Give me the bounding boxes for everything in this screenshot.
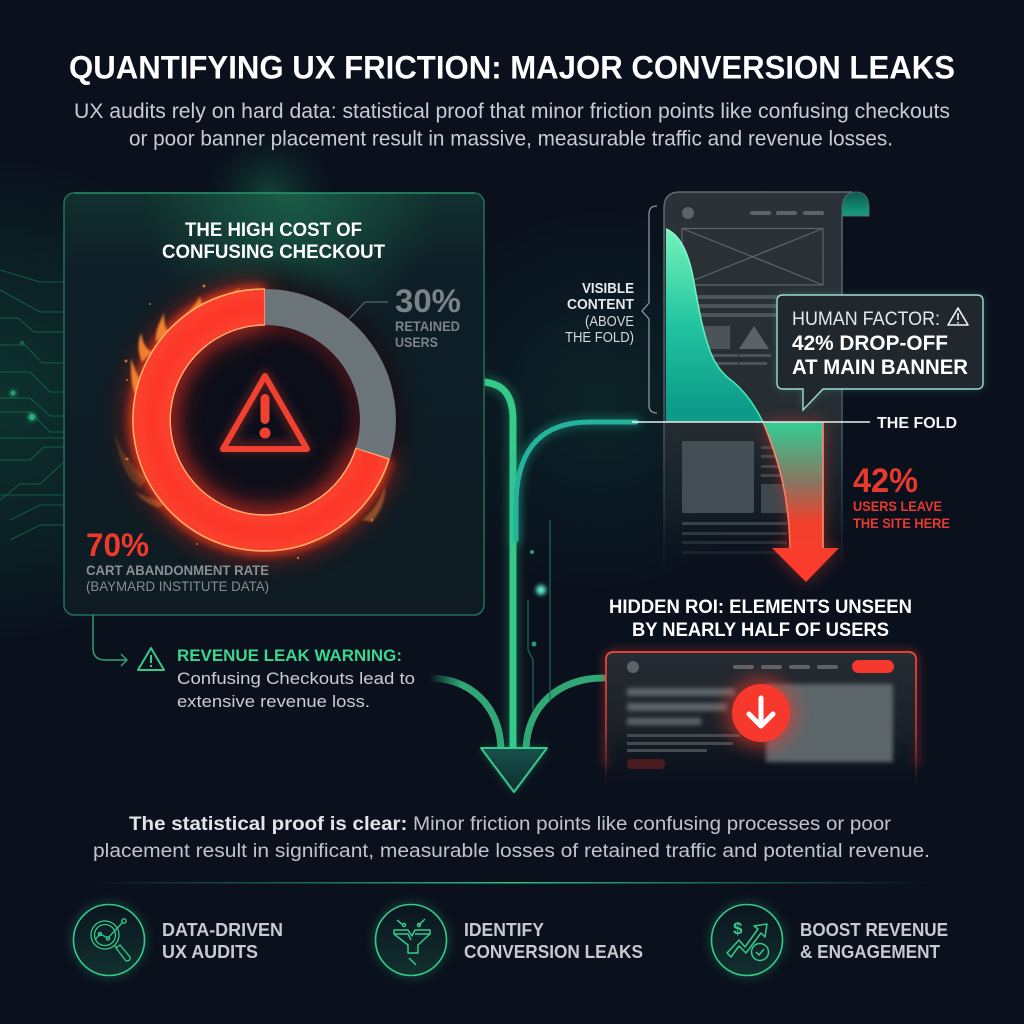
- fold label: THE FOLD: [877, 415, 957, 432]
- fold line: [632, 421, 870, 423]
- stat: 30 percent retained: [349, 283, 461, 350]
- subtitle: UX audits rely on hard data: statistical proof that minor friction points like confusing checkouts: [74, 100, 950, 123]
- callout: revenue leak warning: [93, 615, 415, 711]
- stat: 42 percent leave: 42%: [853, 462, 918, 500]
- below the fold content: [682, 441, 791, 554]
- panel: checkout abandonment: [64, 193, 484, 615]
- icon: magnifier on chart: [73, 904, 145, 976]
- callout: human factor: [777, 295, 983, 410]
- page header: [682, 207, 824, 219]
- small circuit trace near pipe: [528, 520, 550, 710]
- feature: boost revenue and engagement: BOOST REVENUE: [800, 920, 948, 940]
- stat: 70 percent abandonment: CART ABANDONMENT RATE: [86, 562, 269, 578]
- wireframe image: [682, 228, 823, 285]
- conclusion text: placement result in significant, measurable losses of retained traffic and potential revenue.: [93, 841, 930, 862]
- page curl: [842, 192, 869, 216]
- visible content label: VISIBLE: [582, 281, 634, 297]
- icon: growth arrow with dollar: $: [733, 919, 743, 938]
- feature: data-driven ux audits: DATA-DRIVEN: [162, 920, 283, 940]
- icon: growth arrow with dollar: [711, 904, 783, 976]
- bracket: visible content: [642, 206, 657, 413]
- drop-off flow area and arrow: [666, 229, 839, 582]
- panel heading: CONFUSING CHECKOUT: [162, 242, 385, 263]
- stat: 30 percent retained: USERS: [395, 334, 438, 350]
- feature: boost revenue and engagement: & ENGAGEMENT: [800, 942, 940, 962]
- stat: 42 percent leave: THE SITE HERE: [853, 516, 950, 531]
- divider: [90, 882, 930, 884]
- subtitle: [74, 100, 950, 150]
- stat: 30 percent retained: 30%: [395, 283, 461, 319]
- icon: small warning: [948, 308, 968, 325]
- browser nav: [627, 660, 894, 673]
- feature: identify conversion leaks: IDENTIFY: [464, 920, 544, 940]
- stat: 42 percent leave: [853, 462, 950, 531]
- hidden roi heading: [609, 597, 912, 641]
- blurred content: [627, 684, 893, 769]
- stat: 42 percent leave: USERS LEAVE: [853, 499, 942, 514]
- wireframe lines and shapes: [695, 295, 790, 365]
- visible content label: THE FOLD): [565, 330, 634, 346]
- conclusion text: The statistical proof is clear: Minor friction points like confusing processes or poor: [129, 814, 892, 835]
- hidden roi heading: BY NEARLY HALF OF USERS: [632, 620, 889, 641]
- conclusion text: [93, 814, 930, 862]
- feature: identify conversion leaks: CONVERSION LEAKS: [464, 942, 643, 962]
- callout: human factor: AT MAIN BANNER: [792, 356, 968, 379]
- panel heading: THE HIGH COST OF: [185, 220, 362, 241]
- webpage scroll mockup: [664, 192, 869, 582]
- feature: data-driven ux audits: UX AUDITS: [162, 942, 258, 962]
- callout: revenue leak warning: REVENUE LEAK WARNING:: [177, 646, 402, 665]
- callout: revenue leak warning: extensive revenue loss.: [177, 692, 370, 711]
- hidden roi heading: HIDDEN ROI: ELEMENTS UNSEEN: [609, 597, 912, 618]
- visible content label: [565, 281, 634, 346]
- browser mockup: [606, 652, 916, 788]
- stat: 70 percent abandonment: (BAYMARD INSTITUTE DATA): [86, 578, 269, 594]
- visible content label: (ABOVE: [585, 314, 634, 330]
- circuit lines decoration: [0, 270, 64, 540]
- title: QUANTIFYING UX FRICTION: MAJOR CONVERSION LEAKS: [69, 50, 955, 86]
- visible content label: CONTENT: [567, 297, 634, 313]
- callout: revenue leak warning: Confusing Checkouts lead to: [177, 669, 415, 688]
- feature: boost revenue and engagement: [711, 904, 948, 976]
- icon: leaking funnel: [375, 904, 447, 976]
- stat: 30 percent retained: RETAINED: [395, 318, 460, 334]
- callout: human factor: 42% DROP-OFF: [792, 332, 948, 355]
- feature: data-driven ux audits: [73, 904, 283, 976]
- stat: 70 percent abandonment: 70%: [86, 527, 149, 563]
- arrow head: merged flow: [481, 748, 547, 792]
- connector pipes: [428, 382, 636, 750]
- stat: 70 percent abandonment: [86, 527, 269, 594]
- panel heading: [162, 220, 385, 263]
- subtitle: or poor banner placement result in massive, measurable traffic and revenue losses.: [129, 128, 893, 150]
- donut chart: [100, 255, 430, 585]
- icon: red down arrow: [725, 677, 797, 749]
- icon: warning triangle: [223, 376, 307, 449]
- flames: [114, 288, 385, 522]
- callout: human factor: HUMAN FACTOR:: [792, 309, 940, 330]
- feature: identify conversion leaks: [375, 904, 643, 976]
